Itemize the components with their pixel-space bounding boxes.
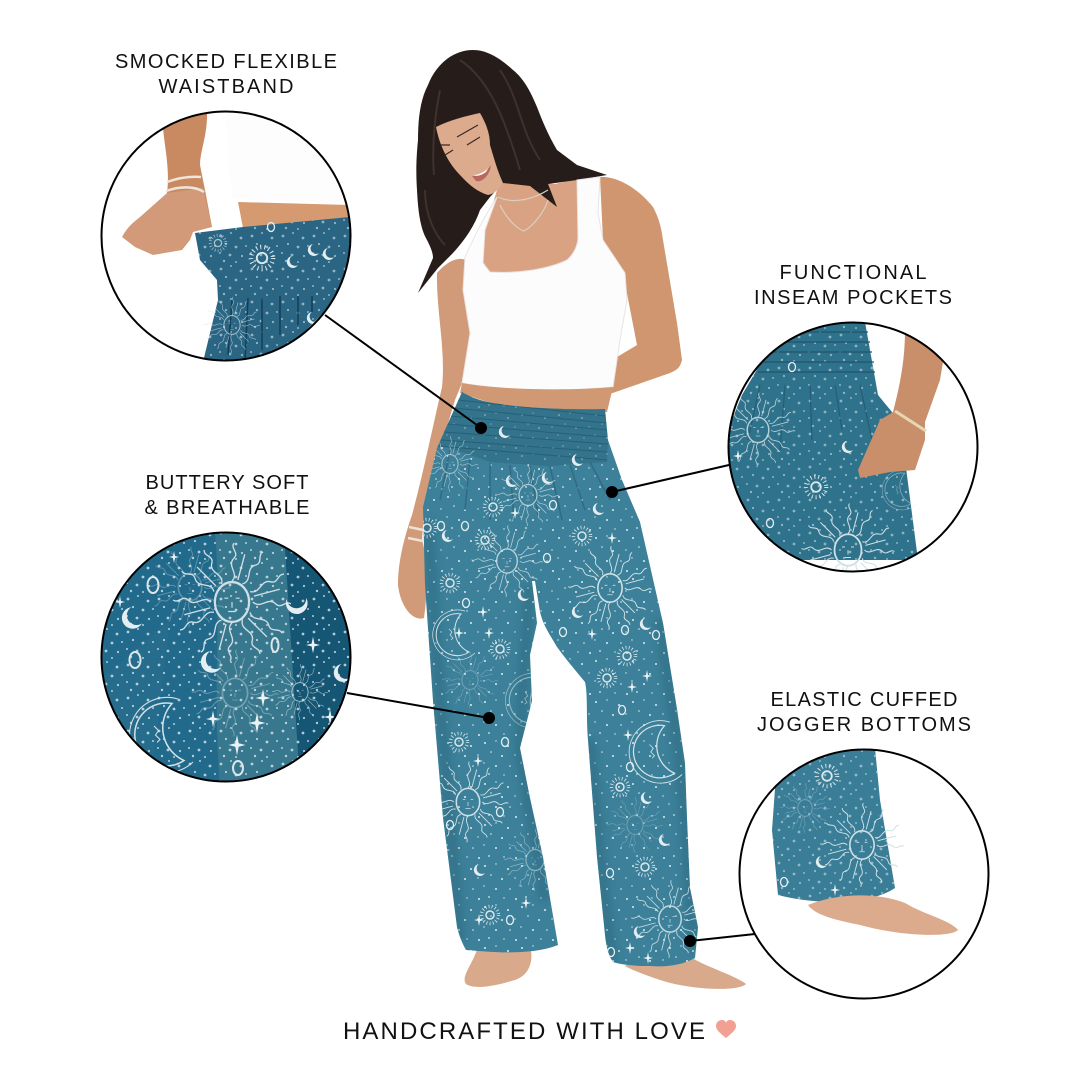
forearm [163, 110, 212, 227]
hair highlights [425, 60, 540, 245]
gathers [440, 450, 610, 520]
connector: waistband [325, 315, 487, 434]
necklace [498, 190, 548, 231]
bracelets [166, 177, 204, 192]
label: smocked flexible waistband: WAISTBAND [158, 76, 294, 98]
smocking [748, 332, 875, 450]
model figure [398, 50, 746, 989]
hair [416, 50, 607, 293]
smile [472, 165, 491, 181]
rings [462, 522, 468, 530]
hand [122, 188, 212, 255]
circle: fabric detail [100, 532, 352, 784]
right foot [625, 955, 746, 989]
foot [808, 895, 958, 935]
label: functional inseam pockets: INSEAM POCKETS [754, 287, 952, 309]
pants [772, 748, 895, 902]
right arm [600, 177, 682, 395]
skin [238, 202, 350, 228]
bracelets [408, 527, 423, 541]
label: elastic cuffed jogger bottoms: ELASTIC CUFFED [770, 689, 958, 711]
label: elastic cuffed jogger bottoms [757, 689, 971, 736]
label: functional inseam pockets: FUNCTIONAL [780, 262, 926, 284]
connector: cuffs [684, 934, 755, 947]
waistband shading [438, 392, 608, 466]
icon: heart [716, 1020, 736, 1038]
crescent moons [433, 610, 475, 660]
print [115, 543, 350, 775]
left foot [465, 945, 531, 987]
face [436, 113, 503, 195]
circle: cuff detail [738, 748, 990, 1000]
label: functional inseam pockets [754, 262, 952, 309]
crescents [442, 530, 453, 542]
connector: fabric [347, 693, 495, 724]
small suns [574, 528, 590, 544]
facial features [441, 125, 480, 155]
pants [423, 392, 698, 966]
left fold [100, 620, 170, 784]
left arm [398, 259, 470, 619]
label: smocked flexible waistband: SMOCKED FLEXIBLE [115, 51, 337, 73]
print [730, 392, 796, 468]
arm [858, 330, 945, 478]
circle: pocket detail [728, 322, 978, 572]
label: buttery soft and breathable [144, 472, 310, 519]
pants [720, 322, 918, 560]
midriff [460, 383, 613, 412]
right dark fold [285, 548, 350, 756]
white tank top [462, 177, 627, 390]
chest and neck [483, 178, 580, 272]
label: buttery soft and breathable: BUTTERY SOFT [146, 472, 308, 494]
print [820, 803, 904, 887]
label: smocked flexible waistband [115, 51, 337, 98]
stars [510, 507, 520, 519]
fabric shading [428, 520, 695, 960]
footer tagline: HANDCRAFTED WITH LOVE [343, 1018, 705, 1045]
label: buttery soft and breathable: & BREATHABLE [144, 497, 310, 519]
pleats [228, 296, 312, 360]
label: elastic cuffed jogger bottoms: JOGGER BOTTOMS [757, 714, 971, 736]
crop top [226, 110, 352, 205]
big sun motifs [568, 546, 652, 630]
pants [195, 217, 350, 362]
print [251, 247, 273, 269]
circle: waistband detail [100, 110, 352, 362]
connector: pockets [606, 465, 729, 498]
smocking lines [438, 400, 608, 460]
bracelet [895, 411, 926, 431]
centre pleat [215, 532, 300, 784]
